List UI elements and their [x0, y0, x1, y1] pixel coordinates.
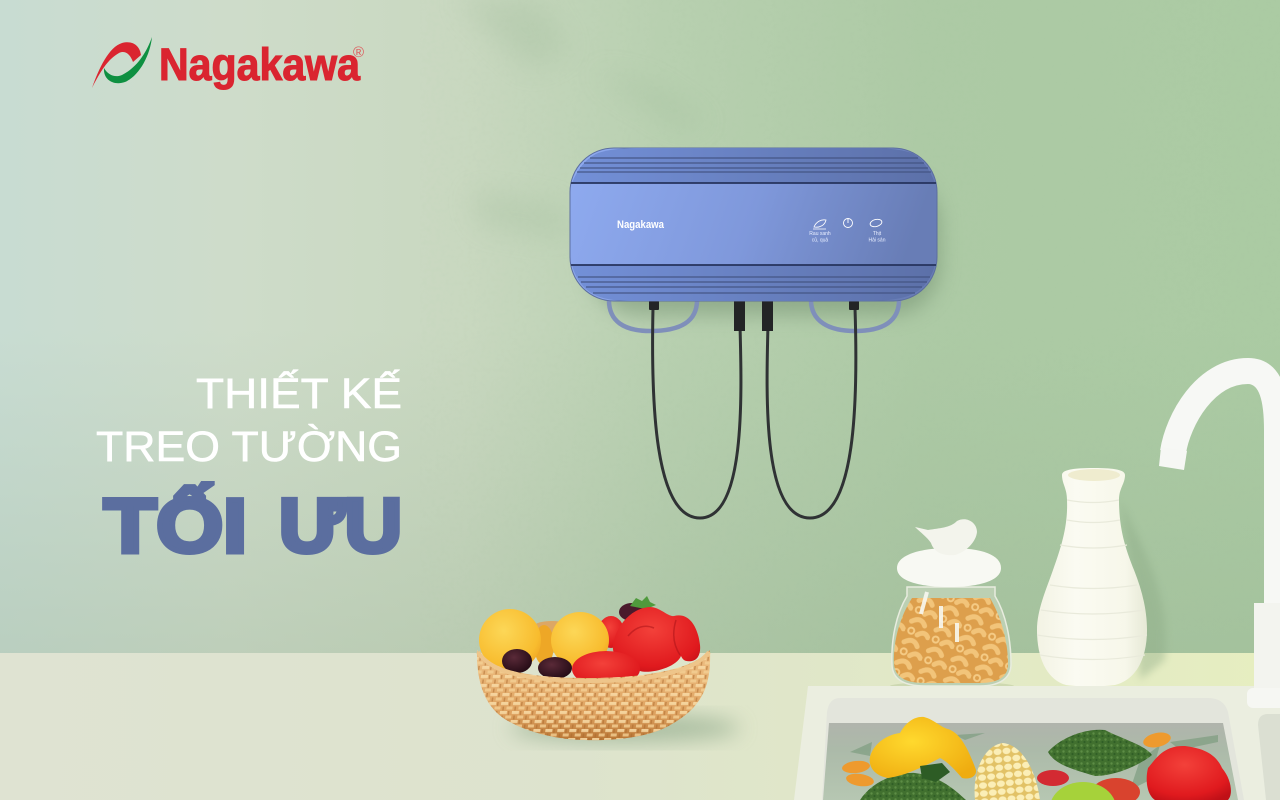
sink	[794, 686, 1280, 800]
cherry left	[502, 649, 532, 673]
cable plugs	[649, 301, 859, 331]
bird knob	[915, 519, 977, 555]
jar highlights	[921, 592, 957, 642]
jar glass	[892, 587, 1011, 686]
plum	[619, 603, 645, 621]
registered mark: ®	[353, 44, 364, 61]
word: TỐI: TỐI	[104, 484, 247, 569]
icon: leaf	[813, 220, 826, 229]
pepper crease	[628, 620, 680, 655]
basket rim	[478, 652, 709, 681]
sink rim	[794, 686, 1280, 800]
headline	[96, 370, 402, 569]
peach right	[551, 612, 609, 668]
jar lid	[897, 548, 1001, 587]
basket shadow	[510, 714, 740, 742]
corn cob	[975, 743, 1040, 800]
vase shadow	[1120, 500, 1166, 680]
red pepper in water	[1147, 746, 1231, 800]
peach left	[479, 609, 541, 671]
leafy greens	[1048, 730, 1152, 776]
vegetable label: Rau xanh	[809, 231, 831, 237]
faucet	[1159, 371, 1280, 708]
logo: Nagakawa	[92, 37, 364, 90]
faucet base	[1247, 688, 1280, 708]
carrots	[841, 730, 1172, 788]
jar shadow	[890, 682, 1014, 690]
black cables	[653, 308, 856, 518]
icon: power	[844, 218, 852, 228]
headline line 2: TREO TƯỜNG	[96, 423, 402, 471]
pasta jar	[890, 519, 1014, 690]
pepper stem	[920, 763, 950, 782]
headline line 3	[104, 484, 402, 569]
headline line 1: THIẾT KẾ	[196, 370, 402, 418]
sink inner wall	[822, 698, 1244, 800]
tomato in water	[1092, 778, 1140, 800]
logo swoosh mark	[92, 37, 152, 88]
vase opening	[1068, 469, 1120, 481]
ceramic vase	[1037, 468, 1166, 686]
word: ƯU: ƯU	[279, 484, 402, 569]
fruit basket	[477, 596, 710, 740]
lime	[1050, 782, 1116, 800]
faucet column	[1254, 603, 1280, 693]
herb stem	[630, 596, 656, 609]
tomato front	[572, 651, 640, 687]
second basin	[1258, 714, 1280, 800]
top ridges	[577, 158, 931, 172]
vase body	[1037, 468, 1147, 686]
bottom ridge band	[572, 265, 935, 301]
broccoli	[860, 773, 966, 800]
device brand: Nagakawa	[617, 219, 665, 231]
faucet neck	[1173, 371, 1277, 612]
red berry	[1037, 770, 1069, 786]
blue hose loops	[609, 298, 899, 331]
red bell pepper	[613, 607, 700, 672]
meat label: Thịt	[873, 231, 882, 237]
basket body	[477, 650, 710, 740]
counter top	[0, 653, 1280, 800]
sink water	[823, 723, 1238, 800]
device body	[570, 148, 937, 301]
seafood label: Hải sản	[869, 238, 886, 244]
top ridge band	[572, 148, 935, 183]
cherry right	[538, 657, 572, 679]
basket back rim	[532, 621, 572, 635]
bottom ridges	[578, 277, 930, 293]
vase rings	[1037, 500, 1147, 660]
basket weave	[477, 650, 710, 740]
device shadow	[590, 175, 940, 315]
tomato behind	[598, 616, 624, 648]
logo wordmark: Nagakawa	[159, 39, 361, 90]
vegetable label line 2: củ, quả	[812, 236, 828, 244]
yellow bell pepper	[870, 717, 976, 779]
pasta fill	[894, 598, 1008, 683]
orange fruit behind	[534, 625, 554, 665]
icon: meat	[869, 218, 883, 228]
faucet nozzle	[1159, 447, 1187, 470]
submerged leaves	[850, 733, 1218, 790]
dark seams	[571, 183, 936, 265]
device: wall-mounted purifier	[570, 148, 937, 301]
